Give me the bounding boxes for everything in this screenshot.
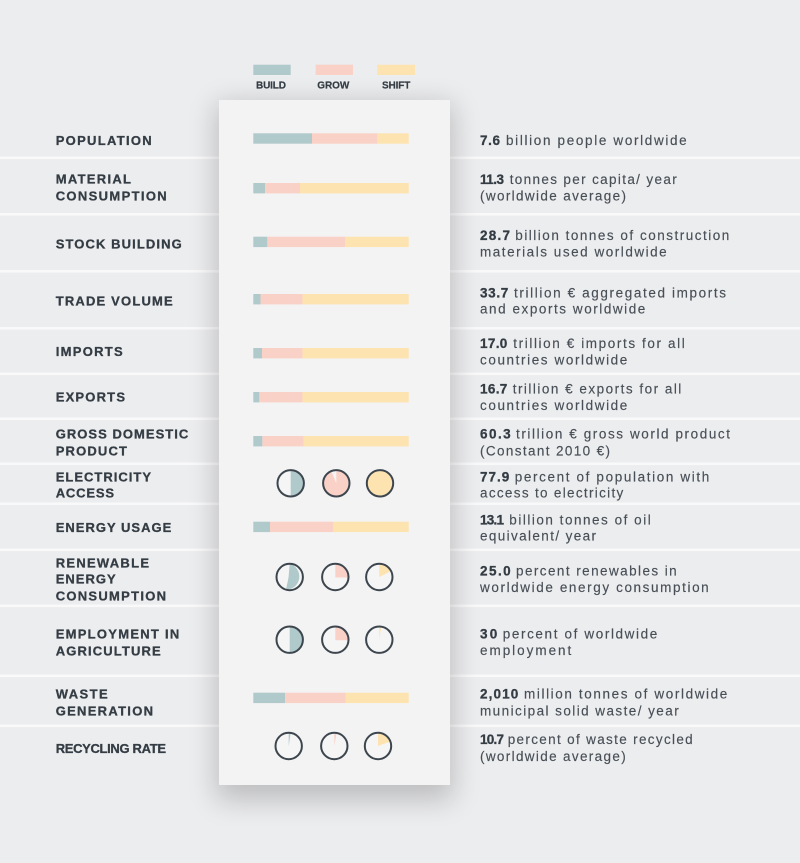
label: gross domestic product <box>56 426 189 458</box>
pie: build <box>276 564 303 590</box>
text: imports: trillion € imports for all <box>513 336 685 351</box>
pie: grow <box>323 470 349 496</box>
label: waste generation <box>56 687 153 718</box>
label: recycling rate: RECYCLING RATE <box>56 741 166 756</box>
label: employment in agriculture <box>56 627 179 658</box>
text: gross domestic product: 60.3 <box>480 427 511 442</box>
text: waste generation: million tonnes of worldwide <box>524 687 727 702</box>
text: imports: 17.0 <box>480 336 507 351</box>
pies: recycling rate <box>276 733 391 759</box>
text: trade volume: trillion € aggregated imports <box>514 285 726 300</box>
pie: shift <box>366 626 392 653</box>
text: exports <box>480 381 681 413</box>
label: electricity access <box>56 469 151 500</box>
pie: build <box>276 733 302 759</box>
text: recycling rate <box>480 732 693 764</box>
text: exports: trillion € exports for all <box>513 381 681 396</box>
text: exports: countries worldwide <box>480 398 627 413</box>
text: energy usage: equivalent/ year <box>480 529 596 544</box>
bar: material consumption <box>253 183 409 193</box>
text: employment in agriculture: 30 <box>480 627 497 642</box>
pie: build <box>276 626 303 653</box>
pies: employment in agriculture <box>276 626 392 653</box>
label: waste generation: GENERATION <box>56 703 153 718</box>
text: renewable energy consumption: worldwide energy consumption <box>479 580 709 595</box>
legend: shift <box>377 65 415 92</box>
label: exports: EXPORTS <box>56 390 125 405</box>
pie: grow <box>321 733 347 759</box>
text: gross domestic product: (Constant 2010 €) <box>480 443 610 458</box>
bar: trade volume <box>253 294 409 304</box>
text: material consumption <box>480 172 677 203</box>
pie: grow <box>322 564 349 590</box>
text: employment in agriculture <box>480 627 657 658</box>
pie: shift <box>367 470 393 496</box>
text: recycling rate: (worldwide average) <box>480 749 626 764</box>
pies: renewable energy consumption <box>276 564 392 590</box>
label: electricity access: ACCESS <box>56 485 114 500</box>
text: energy usage: billion tonnes of oil <box>509 512 651 527</box>
text: stock building <box>480 228 729 260</box>
legend: build: BUILD <box>256 81 286 92</box>
text: employment in agriculture: percent of worldwide <box>503 627 657 642</box>
central panel <box>219 100 450 785</box>
pie: build <box>278 470 304 496</box>
pie: shift <box>366 564 392 590</box>
bar: exports <box>253 392 409 402</box>
text: material consumption: 11.3 <box>480 172 504 187</box>
text: exports: 16.7 <box>480 381 507 396</box>
text: waste generation: municipal solid waste/ year <box>480 703 679 718</box>
text: energy usage: 13.1 <box>480 512 504 527</box>
label: material consumption: MATERIAL <box>56 172 131 187</box>
label: energy usage: ENERGY USAGE <box>56 520 172 535</box>
label: employment in agriculture: EMPLOYMENT IN <box>56 627 179 642</box>
text: electricity access <box>480 469 709 501</box>
text: population: 7.6 <box>480 133 500 148</box>
bar: population <box>253 133 409 144</box>
text: stock building: 28.7 <box>480 228 510 243</box>
text: material consumption: tonnes per capita/ year <box>510 172 677 187</box>
text: trade volume: and exports worldwide <box>480 302 645 317</box>
label: renewable energy consumption: RENEWABLE <box>56 555 149 570</box>
text: stock building: materials used worldwide <box>480 245 667 260</box>
legend <box>253 65 415 92</box>
bar: waste generation <box>253 693 409 703</box>
legend: shift: SHIFT <box>382 81 410 92</box>
text: renewable energy consumption: percent renewables in <box>516 563 677 578</box>
label: electricity access: ELECTRICITY <box>56 469 151 484</box>
label: waste generation: WASTE <box>56 687 108 702</box>
text: gross domestic product <box>480 427 730 458</box>
text: material consumption: (worldwide average) <box>480 188 626 203</box>
text: gross domestic product: trillion € gross world product <box>516 427 730 442</box>
label: renewable energy consumption: CONSUMPTION <box>56 588 166 603</box>
label: stock building: STOCK BUILDING <box>56 236 182 251</box>
bar: imports <box>253 348 409 358</box>
label: employment in agriculture: AGRICULTURE <box>56 643 161 658</box>
pie: grow <box>322 626 349 653</box>
label: renewable energy consumption <box>56 555 166 603</box>
pie: shift <box>365 733 391 759</box>
legend: build <box>253 65 291 92</box>
text: imports: countries worldwide <box>480 353 627 368</box>
text: imports <box>480 336 685 368</box>
text: waste generation <box>480 687 727 718</box>
label: gross domestic product: GROSS DOMESTIC <box>56 426 189 441</box>
label: material consumption <box>56 172 167 203</box>
text: renewable energy consumption <box>479 563 709 595</box>
text: renewable energy consumption: 25.0 <box>480 563 511 578</box>
legend: grow: GROW <box>317 81 350 92</box>
text: recycling rate: percent of waste recycled <box>508 732 693 747</box>
text: electricity access: 77.9 <box>480 469 509 484</box>
stacked bars and pies <box>253 133 409 759</box>
bar: gross domestic product <box>253 436 409 446</box>
label: gross domestic product: PRODUCT <box>56 443 127 458</box>
text: trade volume <box>480 285 726 317</box>
label: imports: IMPORTS <box>56 344 123 359</box>
text: electricity access: access to electricity <box>480 486 624 501</box>
label: renewable energy consumption: ENERGY <box>56 572 116 587</box>
text: electricity access: percent of population with <box>515 469 709 484</box>
label: material consumption: CONSUMPTION <box>56 188 167 203</box>
text: recycling rate: 10.7 <box>480 732 504 747</box>
row labels <box>56 133 189 756</box>
label: population: POPULATION <box>56 133 152 148</box>
bar: energy usage <box>253 522 409 532</box>
row descriptions <box>479 133 730 764</box>
text: trade volume: 33.7 <box>480 285 508 300</box>
label: trade volume: TRADE VOLUME <box>56 293 173 308</box>
text: population: billion people worldwide <box>506 133 687 148</box>
bar: stock building <box>253 237 409 247</box>
text: waste generation: 2,010 <box>480 687 518 702</box>
text: energy usage <box>480 512 651 544</box>
text: employment in agriculture: employment <box>480 643 572 658</box>
legend: grow <box>316 65 353 92</box>
text: stock building: billion tonnes of construction <box>515 228 729 243</box>
pies: electricity access <box>278 470 393 496</box>
